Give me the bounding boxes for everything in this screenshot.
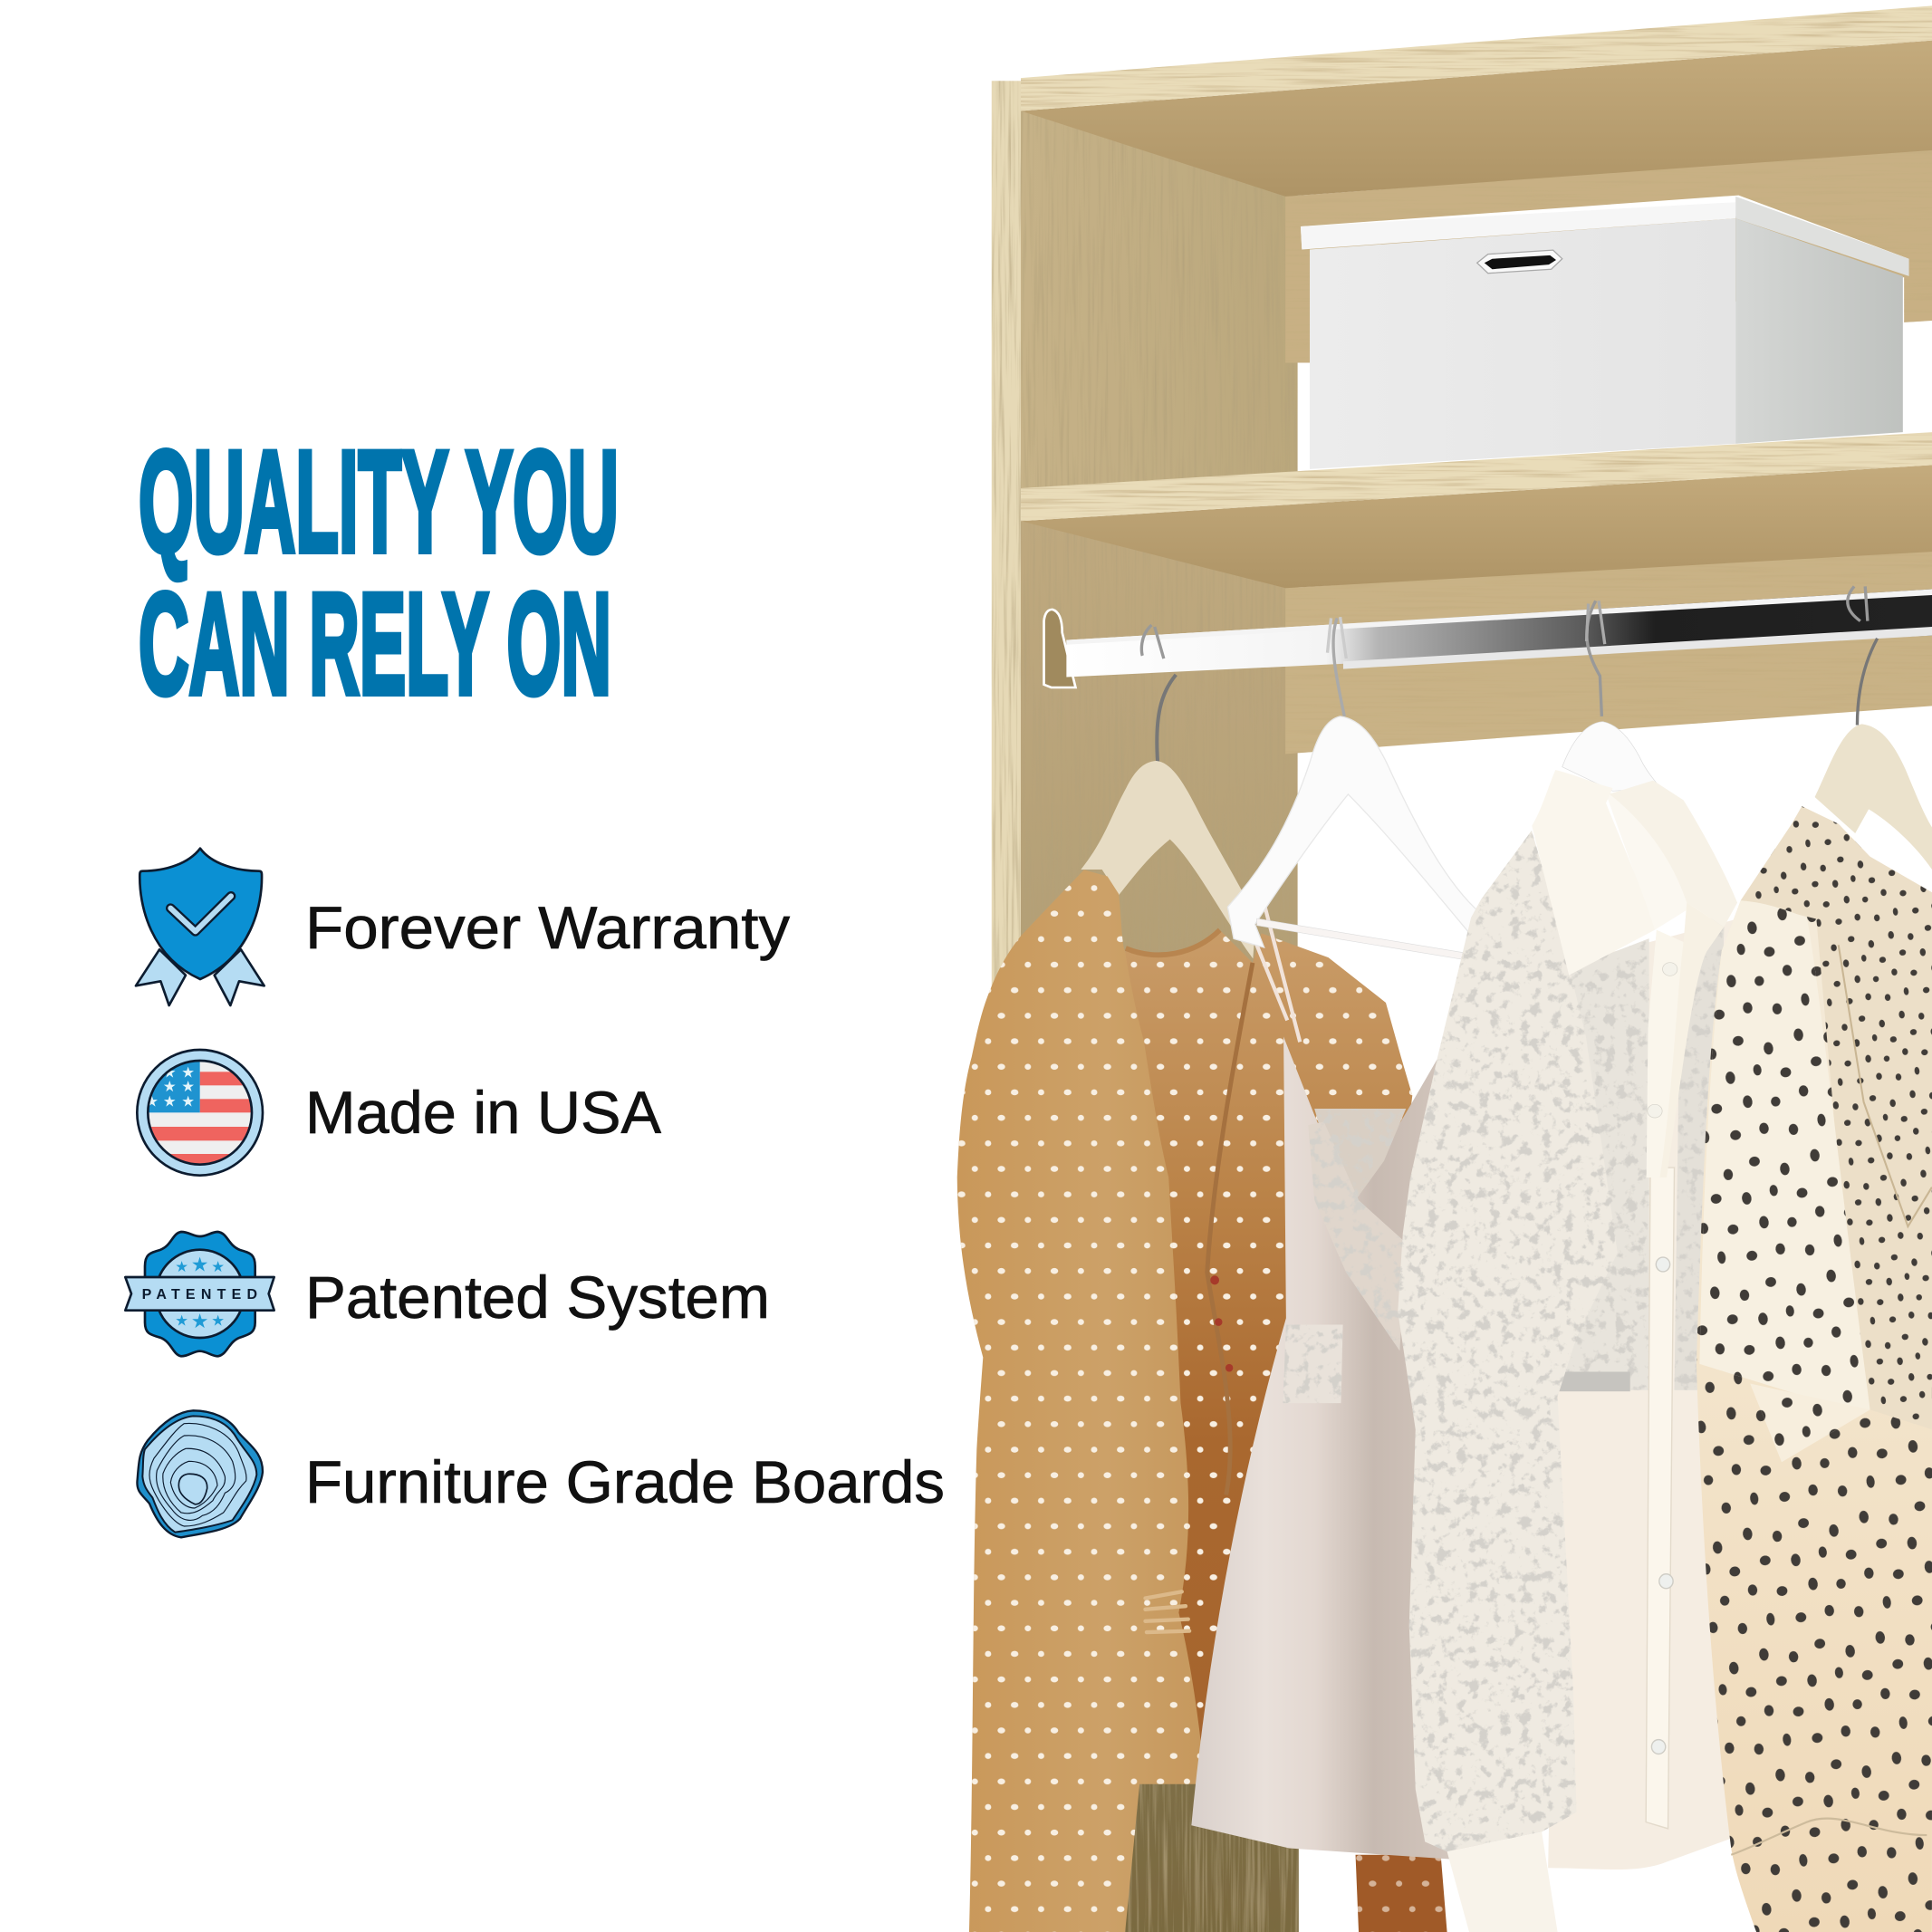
icon: shield with ribbon [136,849,264,1005]
title [139,420,619,725]
icon: patented badge: ★ [211,1258,225,1275]
wood closet unit [992,5,1932,1932]
icon: usa flag: ★ [163,1093,177,1110]
icon: patented badge: ★ [175,1312,188,1329]
icon: usa flag: ★ [181,1063,195,1081]
icon: patented badge: ★ [191,1253,209,1275]
label: patented system: Patented System [305,1264,770,1331]
closet photo illustration [957,5,1932,1932]
hanger hook: middle [1587,601,1605,716]
icon: usa flag: ★ [181,1093,195,1110]
hanger: tan right [1815,586,1932,870]
storage box [1301,196,1909,469]
hanging rod with bracket [1044,590,1932,687]
feature: forever warranty [136,849,790,1005]
icon: tree rings [137,1410,263,1537]
icon: patented badge: ★ [211,1312,225,1329]
icon: usa flag: ★ [163,1078,177,1095]
label: forever warranty: Forever Warranty [305,894,790,961]
icon: patented badge [125,1232,274,1356]
icon: usa flag [137,1050,263,1176]
hanger: tan left [1081,625,1256,958]
icon: patented badge: ★ [191,1310,209,1332]
blouse collar and white hanger [1532,722,1737,1177]
label: furniture grade boards: Furniture Grade Boards [305,1448,945,1515]
icon: patented badge: PATENTED [142,1287,257,1302]
icon: usa flag: ★ [145,1093,159,1110]
cardigan [957,870,1447,1932]
icon: usa flag: ★ [163,1063,177,1081]
feature: furniture grade boards [137,1410,945,1537]
lace blouse and shirt [1398,831,1737,1932]
text: CAN RELY ON [139,563,611,725]
slip dress [1191,903,1485,1861]
polka dot blouse [1697,806,1932,1932]
feature: made in usa [137,1050,661,1176]
feature list [125,849,945,1537]
middle shelf [1021,432,1932,521]
icon: patented badge: ★ [175,1258,188,1275]
label: made in usa: Made in USA [305,1079,661,1146]
text: QUALITY YOU [139,420,619,582]
feature: patented system [125,1232,770,1356]
hanger: white [1227,617,1480,961]
icon: usa flag: ★ [181,1078,195,1095]
